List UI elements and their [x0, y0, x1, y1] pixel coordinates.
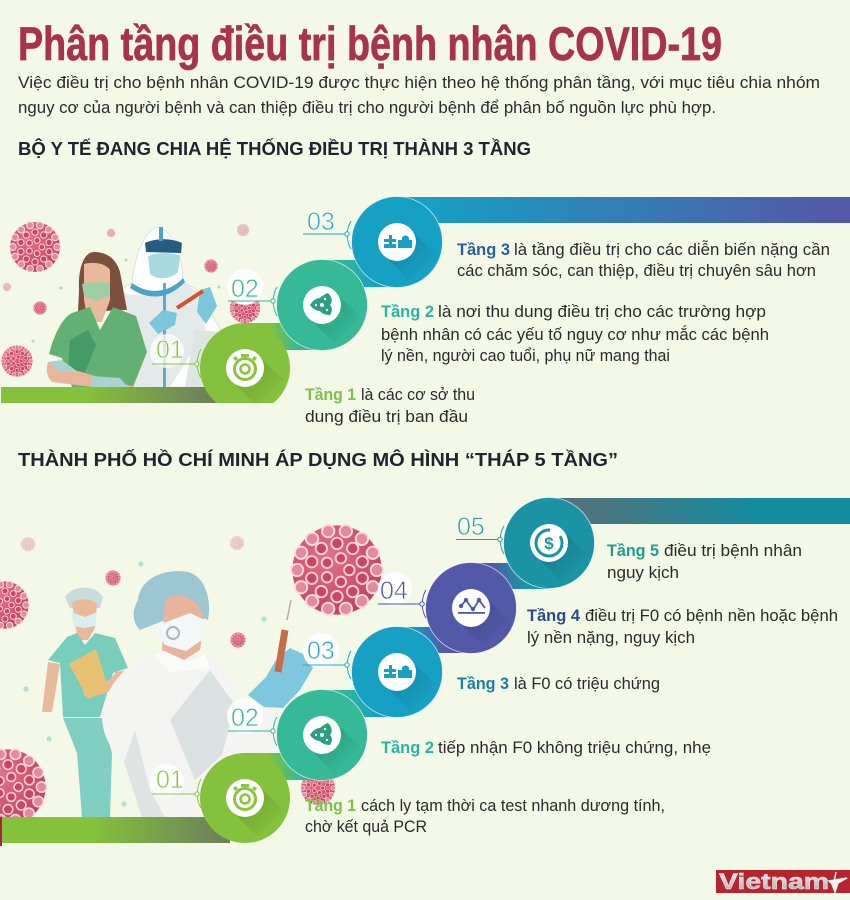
step 3: [352, 626, 471, 718]
illustration: nurse in green scrubs: [47, 252, 147, 387]
bar: section 2 base: [0, 817, 230, 846]
label 02: 02: [231, 704, 259, 732]
bar: section 1 base: [1, 387, 216, 403]
text: tier 1: cách ly tạm thời ca test nhanh dương tính,: [361, 797, 665, 815]
text: tier 5: [607, 542, 802, 582]
logo: Vietnam+: [716, 869, 850, 894]
label 01: 01: [156, 336, 184, 364]
label 01: 01: [156, 766, 184, 794]
label 05: [456, 513, 504, 554]
text: tier 4: [527, 607, 838, 647]
text: tier 4: điều trị F0 có bệnh nền hoặc bệnh: [585, 607, 838, 625]
label 03: [303, 633, 351, 679]
text: tier 1 (section 1): là các cơ sở thu: [361, 386, 475, 404]
label 03: [303, 208, 351, 249]
text: tier 3 (section 1): [457, 240, 830, 280]
steps: section 1: [200, 196, 850, 413]
label 02: 02: [231, 275, 259, 303]
label 05: 05: [457, 513, 485, 541]
text: tier 2 (section 1): Tầng 2: [381, 303, 434, 321]
heading: section 2: THÀNH PHỐ HỒ CHÍ MINH ÁP DỤNG MÔ HÌNH “THÁP 5 TẦNG”: [18, 449, 618, 470]
logo: Vietnam+: Vietnam: [719, 869, 829, 894]
steps: section 2: [200, 498, 850, 843]
label 02: [227, 269, 277, 316]
illustration: doctor with syringe: [102, 571, 313, 817]
text: tier 2 (section 1): bệnh nhân có các yếu tố nguy cơ như mắc các bệnh: [381, 325, 769, 344]
text: tier 5: Tầng 5: [607, 542, 659, 560]
label 01: [150, 334, 201, 378]
text: tier 1: [305, 797, 665, 836]
text: tier 1 (section 1): dung điều trị ban đầu: [305, 408, 468, 426]
intro text: nguy cơ của người bệnh và can thiệp điều trị cho người bệnh để phân bố nguồn lực phù hợp.: [18, 99, 716, 117]
intro text: [18, 74, 820, 117]
label 04: 04: [380, 577, 408, 605]
text: tier 5: điều trị bệnh nhân: [664, 542, 802, 560]
text: tier 2 (section 1): lý nền, người cao tuổi, phụ nữ mang thai: [381, 347, 670, 365]
text: tier 3 (section 1): là tầng điều trị cho các diễn biến nặng cần: [514, 240, 830, 259]
illustration: nurse with folder: [42, 588, 128, 817]
number labels: section 1: [150, 208, 351, 378]
intro text: Việc điều trị cho bệnh nhân COVID-19 được thực hiện theo hệ thống phân tầng, với mục tiêu chia nhóm: [18, 74, 820, 92]
text: tier 2: tiếp nhận F0 không triệu chứng, nhẹ: [438, 739, 711, 757]
text: tier 2 (section 1): [381, 303, 769, 365]
text: tier 1 (section 1): Tầng 1: [305, 386, 356, 404]
viruses: section 2: [0, 525, 383, 825]
text: tier 3: Tầng 3: [457, 675, 509, 693]
text: tier 4: Tầng 4: [527, 607, 581, 625]
text: tier 4: lý nền nặng, nguy kịch: [527, 629, 695, 647]
label 02: [227, 698, 277, 746]
label 04: [378, 572, 426, 618]
number labels: section 2: [150, 513, 504, 808]
text: tier 3 (section 1): các chăm sóc, can thiệp, điều trị chuyên sâu hơn: [457, 262, 816, 280]
text: tier 3 (section 1): Tầng 3: [457, 241, 510, 259]
step 3: [352, 196, 850, 288]
illustration: medic in protective suit: [120, 227, 222, 387]
step 1: [200, 753, 322, 843]
step 5: $: [544, 534, 554, 553]
label 01: [150, 764, 201, 808]
label 03: 03: [307, 208, 335, 236]
step 1: [200, 323, 316, 403]
step 2: [276, 260, 397, 350]
text: tier 1 (section 1): [305, 386, 475, 426]
text: tier 1: Tầng 1: [305, 797, 356, 815]
text: tier 3: là F0 có triệu chứng: [514, 675, 660, 693]
step 2: [276, 690, 397, 780]
heading: section 1: BỘ Y TẾ ĐANG CHIA HỆ THỐNG ĐIỀU TRỊ THÀNH 3 TẦNG: [18, 138, 531, 159]
step 4: [426, 562, 549, 654]
text: tier 1: chờ kết quả PCR: [305, 818, 427, 836]
label 03: 03: [307, 637, 335, 665]
text: tier 2: Tầng 2: [381, 739, 434, 757]
text: tier 5: nguy kịch: [607, 564, 679, 582]
step 5: [504, 498, 850, 588]
viruses: section 1: [1, 222, 261, 377]
text: tier 2 (section 1): là nơi thu dung điều trị cho các trường hợp: [438, 303, 766, 321]
